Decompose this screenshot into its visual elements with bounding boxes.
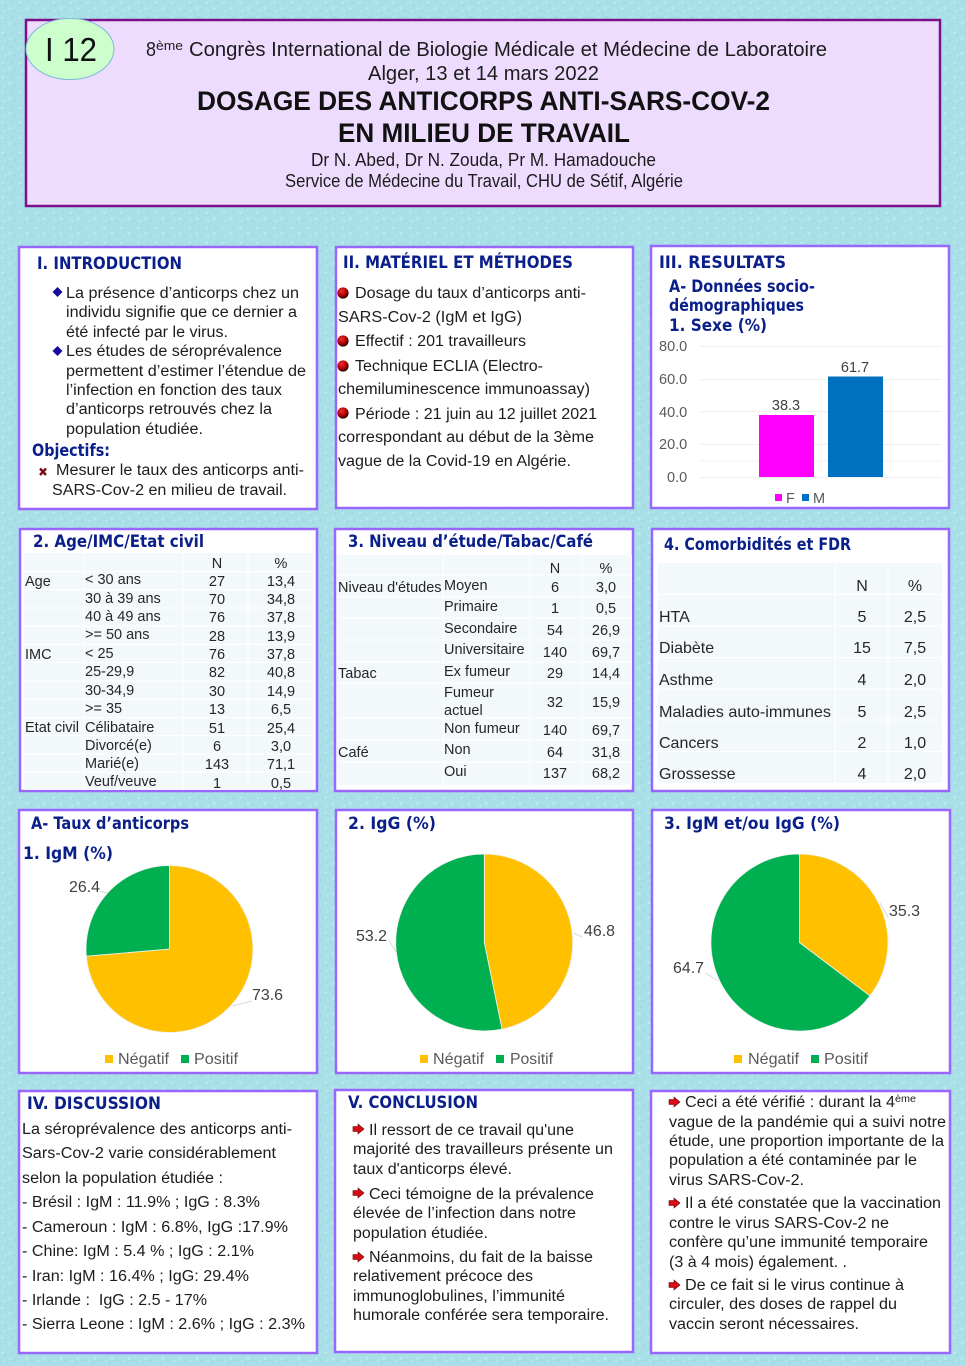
- table: niveau d'etude tabac cafe: actuel: [444, 703, 483, 719]
- text: effectif: Effectif : 201 travailleurs: [355, 333, 526, 350]
- table: comorbidites et FDR: 2,5: [904, 704, 926, 721]
- table: age imc etat civil: 37,8: [267, 647, 295, 663]
- legend: [734, 1051, 869, 1068]
- table: age imc etat civil: 0,5: [271, 776, 291, 792]
- bar: M: [828, 376, 883, 477]
- table: comorbidites et FDR: HTA: [659, 609, 690, 626]
- congress name: 8: [146, 39, 156, 61]
- table: niveau d'etude tabac cafe: Non fumeur: [444, 721, 520, 737]
- text block: discussion: - Cameroun : IgM : 6.8%, IgG :17.9%: [22, 1219, 288, 1236]
- text block: introduction bullet 2: [66, 343, 306, 438]
- table: age imc etat civil: N: [212, 556, 222, 572]
- icon: red ball bullet: [337, 360, 349, 372]
- table: age imc etat civil: 28: [209, 629, 225, 645]
- table: age imc etat civil: 76: [209, 610, 225, 626]
- text block: objective: Mesurer le taux des anticorps anti-: [56, 462, 304, 479]
- text block: vaccination: contre le virus SARS-Cov-2 ne: [669, 1215, 889, 1232]
- panel: discussion: [19, 1091, 317, 1353]
- table: comorbidites et FDR: Asthme: [659, 672, 713, 689]
- table: comorbidites et FDR: 2,0: [904, 766, 926, 783]
- icon: red arrow: [353, 1188, 364, 1198]
- text block: rappel: [669, 1277, 904, 1333]
- table: age imc etat civil: 40 à 49 ans: [85, 609, 161, 625]
- text block: periode: vague de la Covid-19 en Algérie.: [338, 453, 571, 470]
- table: comorbidites et FDR: 4: [858, 766, 867, 783]
- table: age imc etat civil: 13,9: [267, 629, 295, 645]
- value: 61.7: 61.7: [841, 360, 869, 376]
- value: 73.6: 73.6: [252, 987, 283, 1004]
- table: age imc etat civil: 30-34,9: [85, 683, 134, 699]
- table: comorbidites et FDR: Maladies auto-immunes: [659, 704, 831, 721]
- panel: IgM et/ou IgG: [652, 810, 950, 1073]
- table: age imc etat civil: 13,4: [267, 574, 295, 590]
- text block: conclusion 1: [353, 1122, 613, 1178]
- table: age imc etat civil: IMC: [25, 647, 52, 663]
- heading: IgM et/ou IgG: 3. IgM et/ou IgG (%): [664, 814, 840, 833]
- table: age imc etat civil: >= 50 ans: [85, 627, 150, 643]
- table: niveau d'etude tabac cafe: 6: [551, 580, 559, 596]
- table: age imc etat civil: 70: [209, 592, 225, 608]
- icon: diamond bullet: [52, 346, 62, 356]
- table: comorbidites et FDR: Grossesse: [659, 766, 736, 783]
- text block: quatrieme vague: étude, une proportion importante de la: [669, 1133, 944, 1150]
- table: comorbidites et FDR: Diabète: [659, 640, 714, 657]
- subheading: donnees socio-demographiques: A- Données socio-: [669, 277, 815, 296]
- y axis labels: [659, 339, 687, 486]
- text block: objective: SARS-Cov-2 en milieu de travail.: [52, 482, 287, 499]
- heading: conclusion: V. CONCLUSION: [348, 1093, 478, 1112]
- table: comorbidites et FDR: 1,0: [904, 735, 926, 752]
- text block: vaccination: Il a été constatée que la vaccination: [685, 1195, 941, 1212]
- table: age imc etat civil: 25,4: [267, 721, 295, 737]
- text block: conclusion 3: immunoglobulines, l’immunité: [353, 1288, 565, 1305]
- table: comorbidites et FDR: 2,0: [904, 672, 926, 689]
- table: niveau d'etude tabac cafe: Oui: [444, 764, 467, 780]
- text block: discussion: La séroprévalence des anticorps anti-: [22, 1121, 292, 1138]
- slice: negatif 35.3: [799, 854, 888, 996]
- y axis labels: 40.0: [659, 405, 687, 421]
- heading: niveau d'etude tabac cafe: 3. Niveau d’étude/Tabac/Café: [348, 532, 593, 551]
- table: age imc etat civil: 37,8: [267, 610, 295, 626]
- icon: red arrow: [669, 1097, 680, 1107]
- text block: periode: Période : 21 juin au 12 juillet 2021: [355, 406, 597, 423]
- table: niveau d'etude tabac cafe: 140: [543, 645, 567, 661]
- slice: positif 64.7: [711, 854, 870, 1031]
- panel: niveau d'etude tabac cafe: [335, 529, 633, 791]
- table: niveau d'etude tabac cafe: 137: [543, 766, 567, 782]
- subheading: donnees socio-demographiques: démographiques: [669, 296, 804, 315]
- text block: discussion: - Brésil : IgM : 11.9% ; IgG : 8.3%: [22, 1194, 260, 1211]
- table: niveau d'etude tabac cafe: 3,0: [596, 580, 616, 596]
- table: niveau d'etude tabac cafe: Non: [444, 742, 471, 758]
- bar chart: sexe: [659, 339, 942, 507]
- y axis labels: 80.0: [659, 339, 687, 355]
- text block: vaccination: (3 à 4 mois) également. .: [669, 1254, 847, 1271]
- text block: discussion: Sars-Cov-2 varie considérablement: [22, 1145, 277, 1162]
- authors: [285, 150, 683, 191]
- table: age imc etat civil: Divorcé(e): [85, 738, 152, 754]
- text block: conclusion 1: taux d'anticorps élevé.: [353, 1161, 512, 1178]
- icon: red ball bullet: [337, 407, 349, 419]
- table: age imc etat civil: 40,8: [267, 665, 295, 681]
- panel: conclusion continued: [651, 1091, 950, 1353]
- text block: vaccination: confère qu’une immunité temporaire: [669, 1234, 928, 1251]
- slice: negatif 73.6: [86, 866, 253, 1033]
- table: age imc etat civil: 71,1: [267, 757, 295, 773]
- table: age imc etat civil: Etat civil: [25, 720, 79, 736]
- text block: quatrieme vague: ème: [895, 1094, 916, 1105]
- icon: diamond bullet: [52, 287, 62, 297]
- table: niveau d'etude tabac cafe: N: [550, 561, 560, 577]
- text block: rappel: De ce fait si le virus continue à: [685, 1277, 904, 1294]
- text block: discussion: - Iran: IgM : 16.4% ; IgG: 29.4%: [22, 1268, 249, 1285]
- table: niveau d'etude tabac cafe: 140: [543, 723, 567, 739]
- text block: introduction bullet 2: l’infection en fonction des taux: [66, 382, 282, 399]
- text block: introduction bullet 2: population étudiée.: [66, 421, 203, 438]
- text block: introduction bullet 2: d’anticorps retrouvés chez la: [66, 401, 272, 418]
- text block: quatrieme vague: population a été contaminée par le: [669, 1152, 917, 1169]
- legend: [105, 1051, 239, 1068]
- text block: vaccination: [669, 1195, 941, 1271]
- authors: Dr N. Abed, Dr N. Zouda, Pr M. Hamadouche: [311, 150, 656, 170]
- text block: conclusion 2: élevée de l’infection dans notre: [353, 1205, 576, 1222]
- legend: F: [786, 491, 795, 507]
- text block: dosage: [338, 285, 586, 326]
- table: niveau d'etude tabac cafe: 14,4: [592, 666, 620, 682]
- table: niveau d'etude tabac cafe: Fumeur: [444, 685, 494, 701]
- table: age imc etat civil: 30 à 39 ans: [85, 591, 161, 607]
- table: age imc etat civil: >= 35: [85, 701, 122, 717]
- subheading: IgM: 1. IgM (%): [23, 844, 113, 863]
- heading: age imc etat civil: 2. Age/IMC/Etat civil: [33, 532, 204, 551]
- heading: comorbidites et FDR: 4. Comorbidités et FDR: [664, 535, 851, 554]
- table: niveau d'etude tabac cafe: Primaire: [444, 599, 498, 615]
- legend: Négatif: [748, 1051, 800, 1068]
- y axis labels: 60.0: [659, 372, 687, 388]
- slice: positif 53.2: [396, 854, 502, 1031]
- slice: positif 26.4: [86, 866, 170, 956]
- y axis labels: 20.0: [659, 437, 687, 453]
- panel: age imc etat civil: [20, 529, 317, 792]
- subheading: donnees socio-demographiques: 1. Sexe (%): [669, 316, 767, 335]
- text block: conclusion 3: Néanmoins, du fait de la baisse: [369, 1249, 593, 1266]
- table: niveau d'etude tabac cafe: %: [600, 561, 613, 577]
- table: age imc etat civil: 51: [209, 721, 225, 737]
- table: age imc etat civil: 34,8: [267, 592, 295, 608]
- legend: [775, 491, 825, 507]
- icon: red ball bullet: [337, 287, 349, 299]
- value: 64.7: 64.7: [673, 960, 704, 977]
- text block: rappel: vaccin seront nécessaires.: [669, 1316, 859, 1333]
- table: age imc etat civil: 27: [209, 574, 225, 590]
- text block: conclusion 1: Il ressort de ce travail qu'une: [369, 1122, 574, 1139]
- panel: IgG: [336, 810, 633, 1073]
- table: comorbidites et FDR: 7,5: [904, 640, 926, 657]
- table: niveau d'etude tabac cafe: 26,9: [592, 623, 620, 639]
- value: 26.4: 26.4: [69, 879, 100, 896]
- icon: red ball bullet: [337, 335, 349, 347]
- text block: quatrieme vague: [669, 1094, 946, 1189]
- table: comorbidites et FDR: 5: [858, 704, 867, 721]
- legend: Positif: [824, 1051, 869, 1068]
- table: age imc etat civil: 76: [209, 647, 225, 663]
- subheading: donnees socio-demographiques: [669, 277, 815, 335]
- header banner: [26, 18, 940, 206]
- text block: introduction bullet 1: [66, 285, 299, 341]
- panel: taux d'anticorps, IgM: [19, 810, 317, 1073]
- text block: quatrieme vague: virus SARS-Cov-2.: [669, 1172, 804, 1189]
- table: niveau d'etude tabac cafe: Moyen: [444, 578, 488, 594]
- text block: discussion: selon la population étudiée :: [22, 1170, 223, 1187]
- table: age imc etat civil: 14,9: [267, 684, 295, 700]
- text block: technique: [338, 358, 590, 398]
- congress name: Congrès International de Biologie Médicale et Médecine de Laboratoire: [189, 39, 827, 61]
- table: age imc etat civil: [24, 553, 313, 792]
- table: comorbidites et FDR: 5: [858, 609, 867, 626]
- value: 53.2: 53.2: [356, 928, 387, 945]
- pie chart: IgM: [69, 866, 283, 1068]
- badge: I 12: [26, 18, 114, 80]
- table: niveau d'etude tabac cafe: 32: [547, 695, 563, 711]
- table: niveau d'etude tabac cafe: Secondaire: [444, 621, 517, 637]
- table: comorbidites et FDR: 4: [858, 672, 867, 689]
- legend: [420, 1051, 554, 1068]
- heading: introduction: I. INTRODUCTION: [37, 254, 182, 273]
- table: age imc etat civil: 6: [213, 739, 221, 755]
- y axis labels: 0.0: [667, 470, 687, 486]
- slice: negatif 46.8: [484, 854, 573, 1029]
- table: age imc etat civil: 13: [209, 702, 225, 718]
- table: niveau d'etude tabac cafe: 1: [551, 601, 559, 617]
- legend: Négatif: [118, 1051, 170, 1068]
- text block: rappel: circuler, des doses de rappel du: [669, 1296, 897, 1313]
- table: age imc etat civil: 6,5: [271, 702, 291, 718]
- legend: Positif: [194, 1051, 239, 1068]
- panel: materiel et methodes: [336, 247, 633, 508]
- authors: Service de Médecine du Travail, CHU de Sétif, Algérie: [285, 171, 683, 191]
- text block: discussion: [22, 1121, 305, 1333]
- icon: cross bullet: [40, 468, 46, 475]
- table: niveau d'etude tabac cafe: Universitaire: [444, 642, 525, 658]
- table: age imc etat civil: 25-29,9: [85, 664, 134, 680]
- value: 35.3: 35.3: [889, 903, 920, 920]
- table: comorbidites et FDR: 2: [858, 735, 867, 752]
- table: comorbidites et FDR: Cancers: [659, 735, 719, 752]
- table: comorbidites et FDR: %: [908, 578, 922, 595]
- text block: introduction bullet 1: individu signifie que ce dernier a: [66, 304, 297, 321]
- text block: conclusion 3: relativement précoce des: [353, 1268, 533, 1285]
- icon: red arrow: [669, 1280, 680, 1290]
- table: niveau d'etude tabac cafe: 29: [547, 666, 563, 682]
- table: age imc etat civil: < 30 ans: [85, 572, 141, 588]
- bar: F: [759, 415, 814, 477]
- text block: technique: chemiluminescence immunoassay): [338, 381, 590, 398]
- heading: taux d'anticorps: A- Taux d’anticorps: [31, 814, 189, 833]
- heading: materiel et methodes: II. MATÉRIEL ET MÉTHODES: [343, 253, 573, 272]
- heading: objectifs: Objectifs:: [32, 441, 110, 460]
- table: niveau d'etude tabac cafe: 69,7: [592, 645, 620, 661]
- table: comorbidites et FDR: N: [856, 578, 868, 595]
- icon: red arrow: [353, 1252, 364, 1262]
- table: niveau d'etude tabac cafe: 64: [547, 745, 563, 761]
- text block: periode: [338, 406, 597, 470]
- table: age imc etat civil: %: [275, 556, 288, 572]
- table: niveau d'etude tabac cafe: 68,2: [592, 766, 620, 782]
- icon: red arrow: [669, 1198, 680, 1208]
- text block: conclusion 1: majorité des travailleurs présente un: [353, 1141, 613, 1158]
- panel: conclusion: [335, 1090, 633, 1352]
- text block: introduction bullet 1: La présence d’anticorps chez un: [66, 285, 299, 302]
- table: age imc etat civil: 30: [209, 684, 225, 700]
- table: age imc etat civil: < 25: [85, 646, 114, 662]
- table: age imc etat civil: 3,0: [271, 739, 291, 755]
- text block: conclusion 2: [353, 1186, 594, 1242]
- heading: resultats: III. RESULTATS: [659, 253, 786, 272]
- table: niveau d'etude tabac cafe: 15,9: [592, 695, 620, 711]
- text block: conclusion 2: population étudiée.: [353, 1225, 488, 1242]
- table: niveau d'etude tabac cafe: 69,7: [592, 723, 620, 739]
- table: age imc etat civil: Age: [25, 574, 51, 590]
- table: comorbidites et FDR: 2,5: [904, 609, 926, 626]
- text block: introduction bullet 2: Les études de séroprévalence: [66, 343, 282, 360]
- table: age imc etat civil: 82: [209, 665, 225, 681]
- text block: discussion: - Sierra Leone : IgM : 2.6% ; IgG : 2.3%: [22, 1316, 305, 1333]
- text block: conclusion 3: humorale conférée sera temporaire.: [353, 1307, 609, 1324]
- table: niveau d'etude tabac cafe: [337, 555, 632, 785]
- pie chart: IgG: [356, 854, 615, 1068]
- legend: Positif: [510, 1051, 554, 1068]
- table: age imc etat civil: Veuf/veuve: [85, 774, 157, 790]
- table: niveau d'etude tabac cafe: 54: [547, 623, 563, 639]
- heading: IgG: 2. IgG (%): [348, 814, 436, 833]
- text block: quatrieme vague: vague de la pandémie qui a suivi notre: [669, 1114, 946, 1131]
- text block: quatrieme vague: Ceci a été vérifié : durant la 4: [685, 1094, 895, 1111]
- table: age imc etat civil: 143: [205, 757, 229, 773]
- text block: introduction bullet 1: été infecté par le virus.: [66, 324, 228, 341]
- table: niveau d'etude tabac cafe: Café: [338, 745, 369, 761]
- text block: dosage: SARS-Cov-2 (IgM et IgG): [338, 309, 522, 326]
- text block: introduction bullet 2: permettent d’estimer l’étendue de: [66, 363, 306, 380]
- text block: discussion: - Chine: IgM : 5.4 % ; IgG : 2.1%: [22, 1243, 254, 1260]
- table: age imc etat civil: Célibataire: [85, 720, 154, 736]
- table: comorbidites et FDR: 15: [853, 640, 871, 657]
- table: age imc etat civil: Marié(e): [85, 756, 139, 772]
- text block: conclusion 3: [353, 1249, 609, 1324]
- text block: conclusion 2: Ceci témoigne de la prévalence: [369, 1186, 594, 1203]
- table: niveau d'etude tabac cafe: Niveau d'études: [338, 580, 442, 596]
- legend: M: [813, 491, 825, 507]
- congress name: Alger, 13 et 14 mars 2022: [368, 63, 599, 85]
- title: [197, 86, 770, 148]
- table: niveau d'etude tabac cafe: 0,5: [596, 601, 616, 617]
- value: 46.8: 46.8: [584, 923, 615, 940]
- pie chart: IgM et/ou IgG: [673, 854, 920, 1068]
- heading: discussion: IV. DISCUSSION: [27, 1094, 161, 1113]
- text block: periode: correspondant au début de la 3ème: [338, 429, 594, 446]
- title: EN MILIEU DE TRAVAIL: [338, 118, 630, 148]
- table: age imc etat civil: 1: [213, 776, 221, 792]
- table: niveau d'etude tabac cafe: Tabac: [338, 666, 377, 682]
- value: 38.3: 38.3: [772, 398, 800, 414]
- text block: dosage: Dosage du taux d’anticorps anti-: [355, 285, 586, 302]
- legend: Négatif: [433, 1051, 485, 1068]
- icon: red arrow: [353, 1124, 364, 1134]
- panel: comorbidites et FDR: [652, 529, 949, 791]
- text block: technique: Technique ECLIA (Electro-: [355, 358, 543, 375]
- text block: objective: [52, 462, 304, 499]
- table: niveau d'etude tabac cafe: 31,8: [592, 745, 620, 761]
- title: DOSAGE DES ANTICORPS ANTI-SARS-COV-2: [197, 86, 770, 116]
- table: comorbidites et FDR: [658, 563, 942, 783]
- badge: I 12: I 12: [45, 31, 97, 68]
- panel: introduction: [19, 247, 317, 509]
- text block: discussion: - Irlande : IgG : 2.5 - 17%: [22, 1292, 207, 1309]
- panel: resultats, sexe: [651, 246, 949, 508]
- congress name: [146, 38, 827, 85]
- table: niveau d'etude tabac cafe: Ex fumeur: [444, 664, 510, 680]
- congress name: ème: [156, 38, 183, 53]
